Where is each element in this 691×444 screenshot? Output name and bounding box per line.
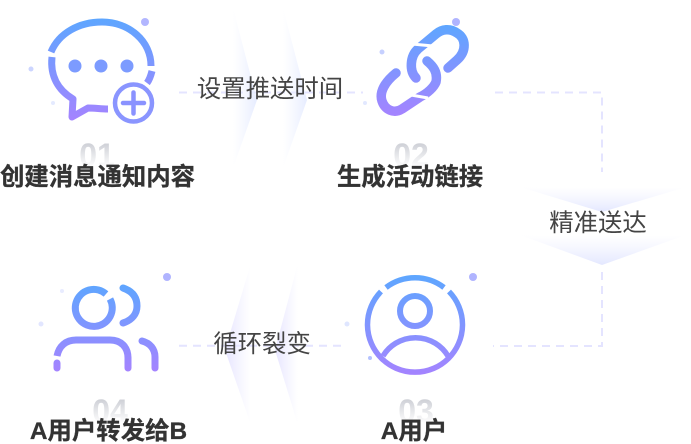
title: 生成活动链接: 生成活动链接: [337, 164, 483, 191]
label: 循环裂变: 循环裂变: [213, 331, 311, 358]
number 04: 04: [92, 393, 128, 429]
arrow: chevrons top: [233, 8, 307, 168]
number 01: 01: [79, 137, 115, 173]
icon: chat bubble with plus: [28, 18, 152, 122]
icon: chain link: [363, 18, 464, 111]
arrow: chevrons right side: [520, 187, 683, 265]
label: 精准送达: 精准送达: [549, 210, 647, 237]
label: 设置推送时间: 设置推送时间: [197, 76, 343, 103]
arrow: chevrons bottom: [225, 263, 298, 425]
title: 创建消息通知内容: 创建消息通知内容: [0, 164, 195, 191]
dashed connector lines: [179, 92, 602, 346]
number 03: 03: [398, 393, 434, 429]
icon: user in circle: [344, 273, 477, 372]
icon: two users: [38, 273, 171, 368]
number 02: 02: [393, 137, 429, 173]
